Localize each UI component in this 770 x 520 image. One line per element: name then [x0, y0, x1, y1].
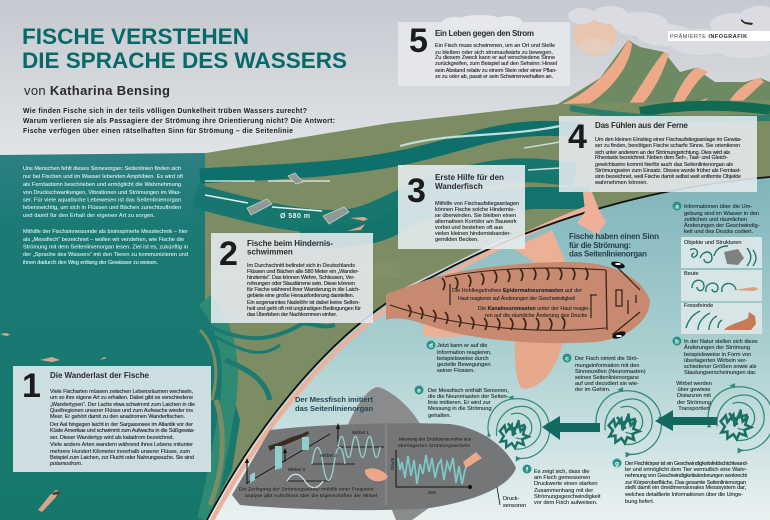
note f: am Fisch gemessenen	[534, 475, 590, 481]
note a: gebung sind im Wasser in den	[684, 211, 759, 217]
note c: c	[565, 356, 569, 362]
note c: Sinneszellen (Neuromasten)	[575, 369, 646, 375]
panel 5: Zu diesem Zweck kann er auf verschiedene Sinne	[435, 55, 555, 61]
intro body white text: als Ferntastsinn beschrieben und ermöglicht die Wahrnehmung	[23, 182, 181, 188]
note a: a	[675, 204, 679, 210]
panel 1: Viele andere Arten wandern während ihres Lebens mitunter	[50, 442, 193, 448]
intro body white text: als „Messfisch“ bezeichnet – wollen wir verstehen, wie Fische die	[23, 237, 184, 243]
vortex transport note: Wirbel werden	[676, 381, 712, 387]
heading: lateral line organ: Fische haben einen Sinn	[569, 232, 659, 241]
intro body white text: nur bei Fischen und im Wasser lebenden Amphibien. Es wird oft	[23, 174, 183, 180]
panel 1: Quellregionen unserer Flüsse und zum Aufwachs wieder ins	[50, 408, 193, 414]
note b: Staulungserscheinungen dar.	[684, 370, 757, 376]
note g: zur Körperoberfläche. Das gesamte Seitenlinienorgan	[625, 480, 746, 486]
clouds	[441, 6, 770, 58]
note a	[672, 202, 760, 235]
panel 1: potamodrom.	[49, 461, 82, 467]
note f: Strömungsgeschwindigkeit	[534, 494, 601, 500]
fish annotations: ren auf die räumliche Änderung des Drucks	[485, 312, 587, 319]
note g: ler und ermöglicht dem Tier vermutlich eine Wahr-	[625, 467, 747, 473]
award badge	[668, 31, 770, 41]
fish annotations: Die Hohlkegelreihen Epidermalneuromasten auf der	[452, 288, 582, 294]
panel 1	[13, 366, 211, 472]
pink pointer	[365, 452, 482, 481]
panel 4: Um den kleinen Einstieg einer Fischaufstiegsanlage im Gewäs-	[595, 137, 742, 143]
panel 5: ze zu oder ab, passt er sein Schwimmverhalten an.	[435, 74, 553, 80]
note b: Änderungen der Strömung	[684, 344, 750, 351]
heading: measuring fish: das Seitenlinienorgan	[295, 404, 373, 413]
panel 4: sich unter anderem an der Strömungsrichtung. Dies wird als	[595, 150, 730, 156]
note g: g	[615, 460, 619, 468]
mountains	[545, 40, 770, 125]
river with fish ladders	[195, 106, 770, 238]
vortex transport note	[676, 381, 712, 412]
intro body white text: ser. Für viele aquatische Lebewesen ist das Seitenlinienorgan	[23, 198, 181, 204]
fish annotations: Haut reagieren auf Änderungen der Geschwindigkeit	[458, 295, 576, 302]
chart: pressure measurement: Zeit	[428, 490, 436, 495]
panel 2: schwimmen	[247, 248, 293, 256]
panel 4: wahrnehmen können.	[594, 180, 648, 186]
panel 3: können Fische solche Hindernis-	[435, 207, 515, 213]
note b	[672, 336, 758, 376]
pressure sensors label: sensoren	[503, 503, 526, 509]
stimuli panel: Fressfeinde	[684, 303, 713, 309]
note b: überlagerten Wirbeln ver-	[684, 358, 747, 364]
intro body white text	[23, 166, 188, 266]
panel 2: Ein sogenanntes Nadelöhr ist dabei keine Selten-	[247, 300, 360, 306]
arrow from panel 4 to the fish	[577, 192, 606, 235]
stimuli panel: Beute	[684, 271, 699, 277]
panel 5: 5	[409, 22, 428, 60]
intro text: Wie finden Fische sich in der teils völligen Dunkelheit trüben Wassers zurecht?	[23, 108, 307, 115]
note f: vor dem Fisch aufweisen.	[534, 500, 598, 506]
fish annotations: Die Kanalneuromasten unter der Haut reagie-	[478, 306, 590, 312]
chart: vortex decomposition: analyse gibt Aufschluss über die Eigenschaften der Wirbel	[245, 493, 377, 499]
note d: beispielsweise durch	[437, 356, 489, 362]
note e: die die Neuromasten der Seiten-	[428, 394, 509, 400]
panel 1: Meer. Er gehört damit zu den anadromen Wanderfischen.	[50, 414, 185, 420]
note a: keit und des Drucks codiert.	[684, 229, 753, 235]
intro body white text: und damit für den Erhalt der eigenen Art zu sorgen.	[23, 213, 155, 219]
panel 3: 3	[407, 172, 426, 210]
panel 4: sinn bezeichnet, weil Fische damit selbst weit entfernte Objekte	[595, 174, 741, 180]
panel 3: alternativen Korridor am Bauwerk	[435, 219, 517, 225]
pressure sensors label	[497, 487, 526, 509]
panel 1: ser. Dieser Wandertyp wird als katadrom bezeichnet.	[50, 435, 174, 441]
small migrating fish	[0, 217, 368, 512]
note c: auf und decodiert sie wie-	[575, 381, 639, 387]
chart: pressure measurement	[390, 436, 472, 495]
note e: Der Messfisch enthält Sensoren,	[428, 388, 509, 394]
note g: Der Fischkörper ist ein Geschwindigkeitsfeldschichtwand-	[625, 461, 748, 467]
left water	[0, 153, 240, 520]
panel 5	[398, 22, 570, 86]
chart: vortex decomposition: Wirbel 3	[288, 467, 305, 472]
panel 2	[211, 233, 373, 323]
note e: Messung in die Strömung	[428, 406, 491, 412]
note g	[612, 458, 748, 505]
panel 2: hindernis“. Das können Wehre, Schleusen, Ver-	[247, 275, 355, 281]
panel 5: sein Abstand relativ zu einem Stein oder einer Pflan-	[435, 68, 557, 74]
panel 1: Beispiel zum Laichen, zur Flucht oder Nahrungssuche. Sie sind	[50, 455, 194, 461]
panel 1: Die Wanderlast der Fische	[50, 371, 150, 380]
vortices	[487, 383, 770, 462]
land bands	[200, 270, 400, 520]
note d: seiner Flossen.	[437, 368, 475, 374]
note e: gehalten.	[428, 413, 451, 419]
panel 4: Strömungssinn zum Einsatz. Dieses wurde früher als Ferntast-	[595, 168, 741, 174]
measuring fish	[232, 387, 516, 520]
panel 2: 2	[219, 235, 238, 273]
heading: lateral line organ	[569, 232, 659, 258]
panel 2: gebiete eine große Herausforderung darstellen.	[247, 293, 354, 299]
author: von Katharina Bensing	[24, 83, 170, 98]
panel 2: heit und geht oft mit ungünstigen Bedingungen für	[247, 306, 361, 312]
note a: Informationen über die Um-	[684, 204, 752, 210]
flow arrows	[542, 410, 717, 440]
note f	[522, 464, 601, 506]
sun	[574, 12, 616, 56]
note g: nehmung von Geschwindigkeitsänderungen senkrecht	[625, 473, 747, 479]
chart: vortex decomposition: Wirbel 1	[352, 430, 369, 435]
land	[200, 100, 770, 520]
panel 1: mehrere Hundert Kilometer innerhalb unserer Flüsse, zum	[50, 449, 190, 455]
intro body white text: lebenswichtig, um sich in Flüssen und Bächen zurechtzufinden	[23, 205, 181, 211]
chart: vortex decomposition: Die Zerlegung der Strömungsstärke mithilfe einer Frequenz-	[239, 486, 375, 492]
panel 2: rohrungen oder Staudämme sein. Diese können	[247, 281, 355, 287]
note g: bung liefert.	[625, 499, 655, 505]
heading: lateral line organ: das Seitenlinienorgan	[569, 250, 647, 258]
note d: Information reagieren,	[437, 350, 492, 356]
pink bank stripe	[210, 207, 590, 520]
note e: e	[417, 388, 421, 394]
panel 1: Küste Amerikas und schwimmt zum Aufwachs in die Süßgewäs-	[50, 428, 195, 434]
panel 3: Wanderfisch	[435, 182, 483, 191]
panel 4	[559, 116, 757, 192]
distance label: Ø 580 m	[280, 213, 310, 220]
panel 1: 1	[22, 367, 41, 405]
note b: schiedener Größen sowie als	[684, 364, 757, 370]
note a: Änderungen der Geschwindig-	[684, 222, 760, 229]
heading: measuring fish: Der Messfisch imitiert	[295, 395, 373, 404]
note d: d	[429, 342, 433, 350]
weirs	[247, 173, 349, 224]
panel 3: gemilden Becken.	[435, 237, 479, 243]
note a: zeitlichen und räumlichen	[684, 217, 747, 223]
panel 1: Viele Fischarten müssen zwischen Lebensräumen wechseln,	[50, 389, 193, 395]
panel 4: Rheotaxis bezeichnet. Neben dem Seh-, Tast- und Gleich-	[595, 155, 728, 161]
panel 5: Ein Leben gegen den Strom	[435, 29, 534, 38]
panel 2: Im Durchschnitt befindet sich in Deutschlands	[247, 263, 355, 269]
title: DIE SPRACHE DES WASSERS	[22, 48, 347, 73]
stimuli panel: Objekte und Strukturen	[684, 240, 742, 246]
chart: pressure measurement: Druck	[390, 457, 395, 470]
award badge: PRÄMIERTE INFOGRAFIK	[670, 33, 747, 40]
note f: Druckwerte einen starken	[534, 481, 597, 487]
note c: Der Fisch nimmt die Strö-	[575, 356, 639, 362]
note e: linie imitieren. Er wird zur	[428, 400, 491, 406]
title	[22, 24, 347, 73]
title: FISCHE VERSTEHEN	[22, 24, 249, 49]
sky background	[0, 0, 770, 160]
heading: lateral line organ: für die Strömung:	[569, 241, 631, 250]
panel 3: vorbei und bestehen oft aus	[435, 225, 503, 231]
intro text: Warum verlieren sie als Passagiere der Strömung ihre Orientierung nicht? Die Antwort:	[23, 118, 335, 125]
note f: Zusammenhang mit der	[534, 488, 593, 494]
panel 2: Flüssen und Bächen alle 580 Meter ein „Wander-	[247, 269, 359, 275]
panel 3: se überwinden. Sie bleiben einen	[435, 213, 516, 219]
chart: vortex decomposition	[239, 423, 384, 499]
panel 3: Erste Hilfe für den	[435, 173, 504, 182]
vortex transport note: der Strömung	[677, 400, 711, 406]
panel 3	[398, 165, 525, 249]
panel 1: Der Aal hingegen laicht in der Sargassosee im Atlantik vor der	[50, 422, 193, 428]
panel 3: Mithilfe von Fischaufstiegsanlagen	[435, 201, 519, 207]
chart: pressure measurement: Messung der Drucksensorreihe aus	[399, 436, 472, 442]
note c: mungsinformation mit den	[575, 363, 639, 369]
note d	[426, 340, 492, 374]
note d: gezielte Bewegungen	[437, 362, 490, 368]
heading: measuring fish	[295, 395, 373, 413]
panel 4: Das Fühlen aus der Ferne	[595, 121, 689, 130]
panel 5: zurückgreifen, zum Beispiel auf den Sehsinn: Hinsel	[435, 61, 557, 67]
note b: In der Natur stellen sich diese	[684, 339, 758, 345]
water below the arc	[207, 177, 770, 520]
note g: welches detaillierte Informationen über die Umge-	[624, 492, 743, 498]
intro body white text: ihnen dadurch den Weg entlang der Gewässer zu weisen.	[23, 260, 158, 266]
intro text	[23, 108, 335, 135]
note c: der im Gehirn.	[575, 387, 611, 393]
stimuli panel	[681, 237, 762, 334]
panel 4: gewichtssinn kommt hierfür auch das Seitenlinienorgan als	[595, 162, 733, 168]
panel 2: das Überleben der Nachkommen einher.	[247, 311, 337, 318]
bird	[741, 19, 753, 25]
panel 5: Ein Fisch muss schwimmen, um an Ort und Stelle	[435, 43, 555, 49]
panel 1: um so ihre eigene Art zu erhalten. Dabei gibt es verschiedene	[50, 395, 193, 401]
panel 4: ser zu finden, benötigen Fische scharfe Sinne. Sie orientieren	[595, 143, 740, 149]
panel 1: „Wandertypen“. Der Lachs etwa schwimmt zum Laichen in die	[50, 402, 195, 408]
fish annotations	[452, 288, 590, 319]
note c: seines Seitenlinienorgans	[575, 375, 639, 381]
note g: stellt damit ein dreidimensionales Messsystem dar,	[625, 485, 746, 491]
chart: pressure measurement: überlagerten Strömungswirbeln	[398, 443, 470, 448]
black arc line	[207, 177, 770, 520]
note b: beispielsweise in Form von	[684, 352, 751, 358]
note e	[414, 386, 509, 419]
panel 3: vielen kleinen hindernisbander-	[435, 231, 511, 237]
big fish	[386, 230, 650, 388]
chart: vortex decomposition: Wirbel 2	[320, 453, 337, 458]
intro body white text: Strömung mit dem Seitenlinienorgan lesen. Ziel ist es, zukünftig in	[23, 244, 188, 250]
intro body white text: Uns Menschen fehlt dieses Sinnesorgan: Seitenlinien finden sich	[23, 166, 181, 172]
note d: Jetzt kann er auf die	[437, 343, 487, 349]
intro body white text: der „Sprache des Wassers“ mit den Tieren zu kommunizieren und	[23, 252, 188, 258]
pressure sensors label: Druck-	[503, 496, 520, 502]
note c	[562, 354, 646, 393]
note b: b	[675, 338, 679, 346]
intro body white text: von Druckschwankungen, Vibrationen und Strömungen im Was-	[23, 190, 181, 196]
note f: f	[526, 466, 529, 474]
intro body white text: Mithilfe der Fischsinnessonde als bioinspirierte Messtechnik – hier	[23, 229, 188, 235]
panel 2: für Fische während ihrer Wanderung in die Laich-	[247, 287, 360, 293]
intro text: Fische verfügen über einen rätselhaften Sinn für Strömung – die Seitenlinie	[23, 128, 293, 135]
panel 4: 4	[568, 118, 587, 156]
vortex transport note: über gewisse	[678, 387, 710, 393]
panel 5: zu bleiben oder sich stromaufwärts zu bewegen.	[435, 50, 553, 56]
note f: Es zeigt sich, dass die	[534, 469, 589, 475]
panel 2: Fische beim Hindernis-	[247, 239, 333, 248]
vortex transport note: Distanzen mit	[677, 393, 711, 399]
vortex transport note: Transportiert	[678, 406, 710, 412]
